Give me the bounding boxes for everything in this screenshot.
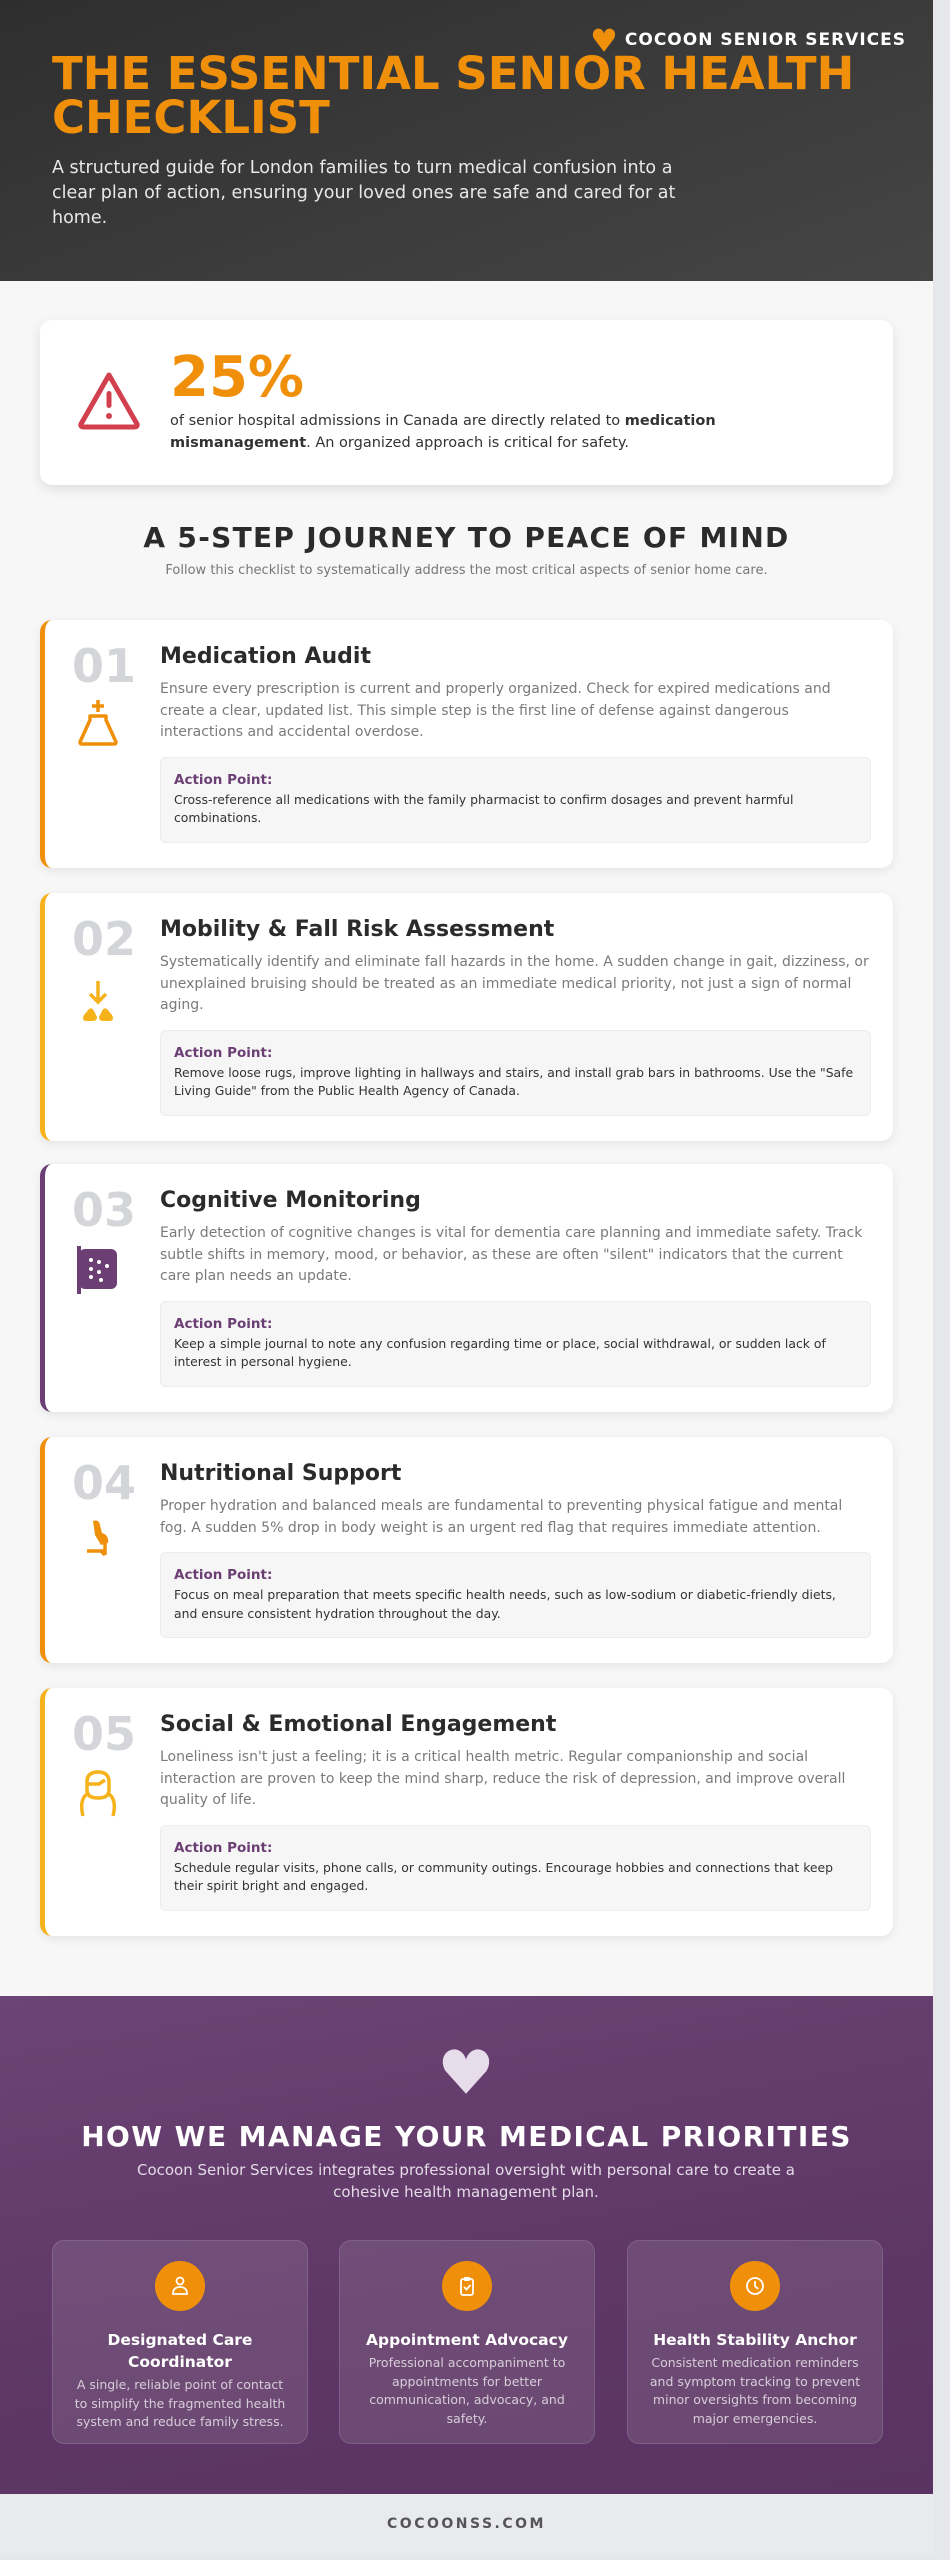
- footer: COCOONSS.COM: [387, 2516, 546, 2532]
- card: step 1: Action Point:: [174, 772, 272, 788]
- card: step 4: 04: [72, 1456, 136, 1510]
- stat text: of senior hospital admissions in Canada are directly related to medication mismanagement. An organized approach is critical for safety.: [170, 413, 716, 451]
- card: step 3: [40, 1164, 893, 1412]
- icon: clipboard: [442, 2261, 492, 2311]
- card: step 3: Keep a simple journal to note any confusion regarding time or place, social withdrawal, or sudden lack of interest in personal hygiene.: [174, 1336, 826, 1369]
- card: step 5: Schedule regular visits, phone calls, or community outings. Encourage hobbies and connections that keep their spirit bright and engaged.: [174, 1860, 833, 1893]
- card: step 2: Mobility & Fall Risk Assessment: [160, 917, 554, 942]
- card: step 5: Social & Emotional Engagement: [160, 1712, 556, 1737]
- subtitle: Cocoon Senior Services integrates professional oversight with personal care to create a cohesive health management plan.: [137, 2161, 795, 2201]
- icon: nutrition: [87, 1520, 108, 1556]
- title: THE ESSENTIAL SENIOR HEALTH CHECKLIST: [52, 47, 854, 144]
- card: step 2: Systematically identify and eliminate fall hazards in the home. A sudden change in gait, dizziness, or unexplained bruising should be treated as an immediate medical priority, not just a sign of normal aging.: [160, 954, 869, 1013]
- card: stability: [627, 2240, 883, 2444]
- card: step 4: Nutritional Support: [160, 1461, 401, 1486]
- card: advocacy: Professional accompaniment to appointments for better communication, advocacy, and safety.: [369, 2355, 565, 2426]
- stat number: 25%: [170, 345, 304, 410]
- card: step 1: 01: [72, 639, 136, 693]
- icon: fall: [83, 981, 113, 1021]
- card: step 4: Action Point:: [174, 1567, 272, 1583]
- card: step 4: [40, 1437, 893, 1663]
- icon: medication: [78, 700, 118, 746]
- card: step 5: [40, 1688, 893, 1936]
- card: step 1: [40, 620, 893, 868]
- card: step 3: Cognitive Monitoring: [160, 1188, 421, 1213]
- card: coordinator: A single, reliable point of contact to simplify the fragmented health system and reduce family stress.: [75, 2377, 285, 2429]
- icon: cognitive: [77, 1246, 117, 1294]
- panel: how we manage: [0, 1996, 933, 2494]
- card: step 5: Action Point:: [174, 1840, 272, 1856]
- card: step 5: 05: [72, 1707, 136, 1761]
- card: step 2: 02: [72, 912, 136, 966]
- card: step 1: Cross-reference all medications with the family pharmacist to confirm dosages and prevent harmful combinations.: [174, 792, 793, 825]
- card: step 2: Remove loose rugs, improve lighting in hallways and stairs, and install grab bars in bathrooms. Use the "Safe Living Guide" from the Public Health Agency of Canada.: [174, 1065, 853, 1098]
- card: step 2: [40, 893, 893, 1141]
- icon: heart: [442, 2049, 490, 2094]
- icon: social: [80, 1770, 116, 1816]
- card: step 5: Loneliness isn't just a feeling; it is a critical health metric. Regular companionship and social interaction are proven to keep the mind sharp, reduce the risk of depression, and improve overall quality of life.: [160, 1749, 845, 1808]
- icon: clock: [730, 2261, 780, 2311]
- card: step 1: Ensure every prescription is current and properly organized. Check for expired medications and create a clear, updated list. This simple step is the first line of defense against dangerous interactions and accidental overdose.: [160, 681, 831, 740]
- card: coordinator: [52, 2240, 308, 2444]
- card: step 4: Proper hydration and balanced meals are fundamental to preventing physical fatigue and mental fog. A sudden 5% drop in body weight is an urgent red flag that requires immediate attention.: [160, 1498, 842, 1536]
- card: advocacy: [339, 2240, 595, 2444]
- card: step 3: Early detection of cognitive changes is vital for dementia care planning and immediate safety. Track subtle shifts in memory, mood, or behavior, as these are often "silent" indicators that the current care plan needs an update.: [160, 1225, 862, 1284]
- subtitle: A structured guide for London families to turn medical confusion into a clear plan of action, ensuring your loved ones are safe and cared for at home.: [52, 158, 675, 228]
- card: stability: Consistent medication reminders and symptom tracking to prevent minor oversights from becoming major emergencies.: [650, 2355, 860, 2426]
- heading: HOW WE MANAGE YOUR MEDICAL PRIORITIES: [81, 2120, 852, 2153]
- card: step 3: Action Point:: [174, 1316, 272, 1332]
- icon: person: [155, 2261, 205, 2311]
- footer: [0, 2494, 933, 2555]
- section heading: [143, 521, 790, 578]
- card: advocacy: Appointment Advocacy: [366, 2331, 568, 2349]
- stat card: [40, 320, 893, 485]
- card: step 2: Action Point:: [174, 1045, 272, 1061]
- brand: COCOON SENIOR SERVICES: [625, 30, 906, 50]
- card: step 1: Medication Audit: [160, 644, 371, 669]
- section heading: Follow this checklist to systematically address the most critical aspects of senior home care.: [165, 563, 768, 578]
- card: coordinator: Designated Care Coordinator: [108, 2331, 252, 2371]
- header: [0, 0, 933, 281]
- card: step 3: 03: [72, 1183, 136, 1237]
- section heading: A 5-STEP JOURNEY TO PEACE OF MIND: [143, 521, 790, 554]
- icon: warning: [78, 372, 140, 430]
- card: stability: Health Stability Anchor: [653, 2331, 857, 2349]
- card: step 4: Focus on meal preparation that meets specific health needs, such as low-sodium or diabetic-friendly diets, and ensure consistent hydration throughout the day.: [174, 1587, 836, 1621]
